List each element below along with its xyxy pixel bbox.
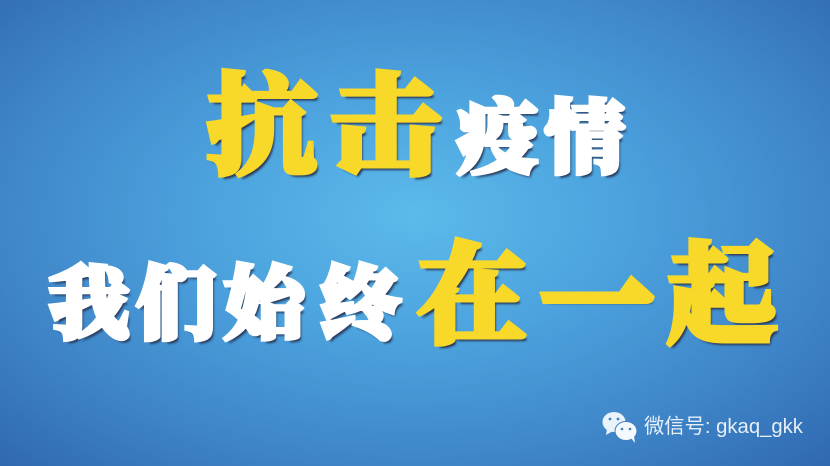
heading line 1: 抗击疫情 [206,67,628,189]
yellow character 抗: 抗 [207,67,317,189]
account name text: 微信号: gkaq_gkk [644,416,803,438]
white character 始: 始 [224,262,304,350]
icon: WeChat bubbles [602,412,636,443]
white character 情: 情 [545,96,625,184]
heading line 2: 我们始终在一起 [48,236,780,366]
white character 们: 们 [136,262,216,350]
yellow character 一: 一 [542,244,652,366]
white character 终: 终 [321,262,401,350]
yellow character 起: 起 [667,236,777,358]
white character 我: 我 [49,262,129,350]
white character 疫: 疫 [457,96,537,184]
watermark: WeChat account [602,412,803,443]
yellow character 击: 击 [331,67,441,189]
yellow character 在: 在 [417,236,527,358]
